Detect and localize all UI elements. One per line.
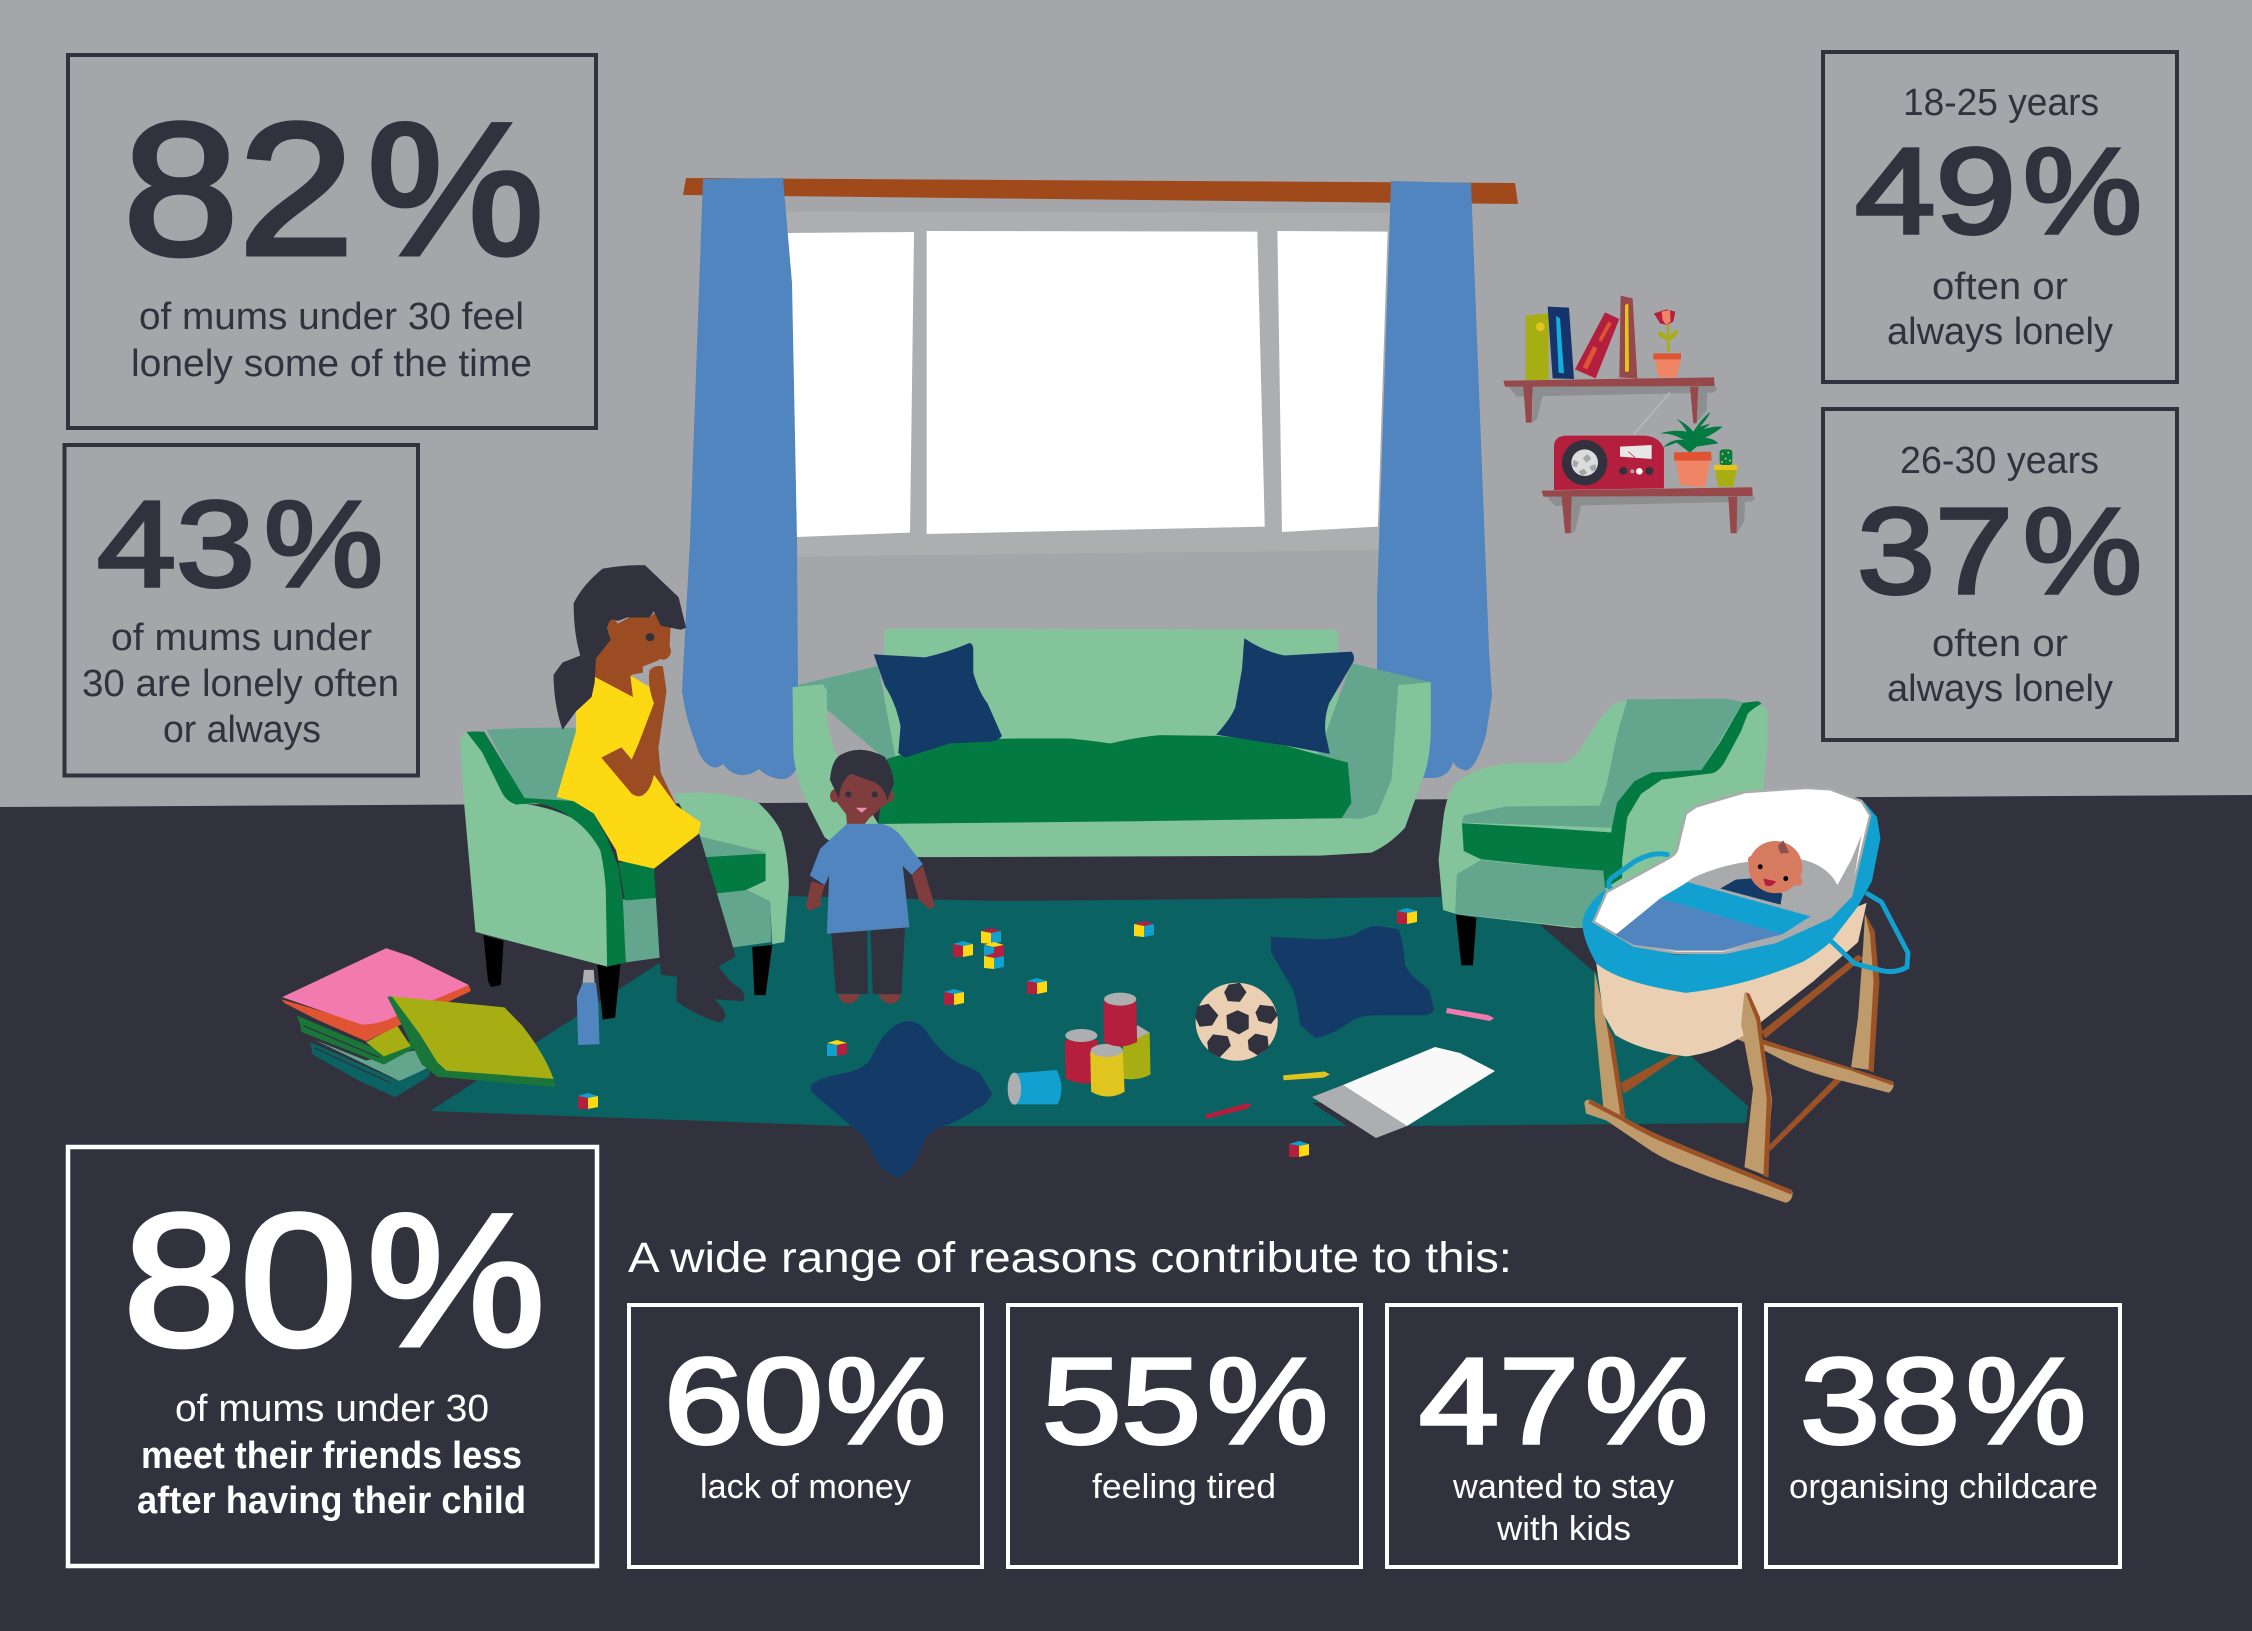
- stat box: 80%: of mums under 30: [175, 1388, 489, 1430]
- stat box: 26-30 years 37%: often or: [1932, 623, 2068, 665]
- basket rim: [1583, 801, 1880, 993]
- reason box: 55%: [1008, 1305, 1361, 1567]
- mother arm: [601, 666, 676, 805]
- window: [785, 212, 1390, 557]
- rug: [430, 896, 1748, 1126]
- child arms: [806, 866, 935, 911]
- reason box: 47%: %: [1585, 1333, 1708, 1469]
- floor: [0, 795, 2252, 1631]
- child: [806, 750, 935, 1004]
- potted plant: [1660, 412, 1723, 487]
- stat box: 82%: lonely some of the time: [131, 343, 532, 385]
- stat box: 43%: 43: [97, 476, 255, 612]
- toy blocks: [578, 908, 1417, 1157]
- stat box: 26-30 years 37%: [1823, 409, 2177, 740]
- mother dress: [557, 676, 701, 869]
- stat box: 26-30 years 37%: 26-30 years: [1900, 440, 2099, 482]
- sofa pillows: [874, 638, 1354, 758]
- mother hair: [554, 565, 686, 730]
- reason box: 55%: %: [1207, 1333, 1328, 1469]
- sofa: [792, 629, 1431, 857]
- reason box: 38%: %: [1966, 1333, 2086, 1469]
- stat box: 18-25 years 49%: %: [2023, 123, 2142, 259]
- stat box: 80%: 80: [123, 1175, 357, 1385]
- reason box: 60%: 60: [664, 1333, 823, 1469]
- mother trousers: [654, 832, 744, 1022]
- reason box: 55%: feeling tired: [1092, 1468, 1276, 1506]
- mum's armchair: [460, 728, 789, 1020]
- baby: [1720, 840, 1802, 905]
- stat box: 26-30 years 37%: %: [2023, 483, 2142, 619]
- stat box: 18-25 years 49%: [1823, 52, 2177, 382]
- reason box: 47%: [1387, 1305, 1740, 1567]
- moses basket on rocking stand: [1583, 788, 1908, 1203]
- mother: [554, 565, 744, 1022]
- reason box: 47%: wanted to stay: [1452, 1468, 1674, 1506]
- reason box: 38%: 38: [1800, 1333, 1960, 1469]
- stat box: 18-25 years 49%: always lonely: [1887, 311, 2113, 353]
- stat box: 82%: [68, 55, 596, 428]
- pile of folded clothes: [281, 948, 556, 1097]
- stat box: 18-25 years 49%: 18-25 years: [1903, 82, 2099, 124]
- reason box: 60%: [629, 1305, 982, 1567]
- stat box: 43%: or always: [163, 709, 321, 751]
- wall shelves: [1503, 296, 1755, 533]
- rose in pot: [1653, 309, 1681, 377]
- books: [1526, 296, 1637, 380]
- stat box: 82%: of mums under 30 feel: [139, 296, 524, 338]
- stat box: 43%: 30 are lonely often: [82, 663, 399, 705]
- reason box: 55%: 55: [1042, 1333, 1201, 1469]
- stat box: 82%: %: [367, 84, 544, 294]
- stat box: 80%: after having their child: [137, 1480, 526, 1522]
- reason box: 47%: with kids: [1496, 1510, 1631, 1548]
- basket interior: [1594, 788, 1870, 953]
- basket body: [1596, 903, 1867, 1056]
- toys on the rug: [811, 926, 1434, 1178]
- second armchair: [1439, 699, 1768, 965]
- stacked cans: [1008, 993, 1151, 1105]
- left curtain: [682, 178, 798, 779]
- reason box: 38%: organising childcare: [1789, 1468, 2098, 1506]
- mother neck and face: [595, 611, 671, 697]
- child trousers: [831, 927, 905, 994]
- reason box: 38%: [1766, 1305, 2120, 1567]
- pink crayon: [1446, 1008, 1494, 1021]
- basket handles: [1609, 854, 1908, 972]
- right curtain: [1377, 181, 1492, 778]
- floor cushion left: [811, 1021, 992, 1178]
- chair legs: [483, 935, 772, 1020]
- stat box: 18-25 years 49%: 49: [1855, 123, 2016, 259]
- reason box: 60%: %: [826, 1333, 946, 1469]
- football: [1195, 983, 1278, 1061]
- radio: [1554, 392, 1670, 490]
- crayons: [1205, 1071, 1330, 1119]
- stat box: 18-25 years 49%: often or: [1932, 266, 2068, 308]
- reasons heading: A wide range of reasons contribute to this:: [628, 1234, 1512, 1282]
- child feet: [838, 994, 901, 1004]
- child shirt: [810, 824, 923, 934]
- reason box: 60%: lack of money: [700, 1468, 911, 1506]
- curtain rod: [683, 178, 1518, 204]
- stat box: 43%: %: [264, 476, 383, 612]
- floor cushion right: [1271, 926, 1434, 1038]
- stat box: 80%: %: [367, 1175, 545, 1385]
- blanket: [1615, 882, 1811, 950]
- stat box: 43%: of mums under: [111, 617, 372, 659]
- stat box: 82%: 82: [123, 84, 354, 294]
- water bottle: [577, 970, 600, 1045]
- stat box: 80%: [68, 1147, 597, 1566]
- stat box: 26-30 years 37%: 37: [1857, 483, 2013, 619]
- child head: [830, 750, 894, 824]
- stat box: 43%: [64, 445, 418, 776]
- paper on the floor: [1312, 1047, 1495, 1145]
- reason box: 47%: 47: [1419, 1333, 1579, 1469]
- cactus: [1714, 449, 1737, 487]
- stat box: 80%: meet their friends less: [141, 1435, 522, 1477]
- stat box: 26-30 years 37%: always lonely: [1887, 668, 2113, 710]
- stand: [1584, 914, 1894, 1203]
